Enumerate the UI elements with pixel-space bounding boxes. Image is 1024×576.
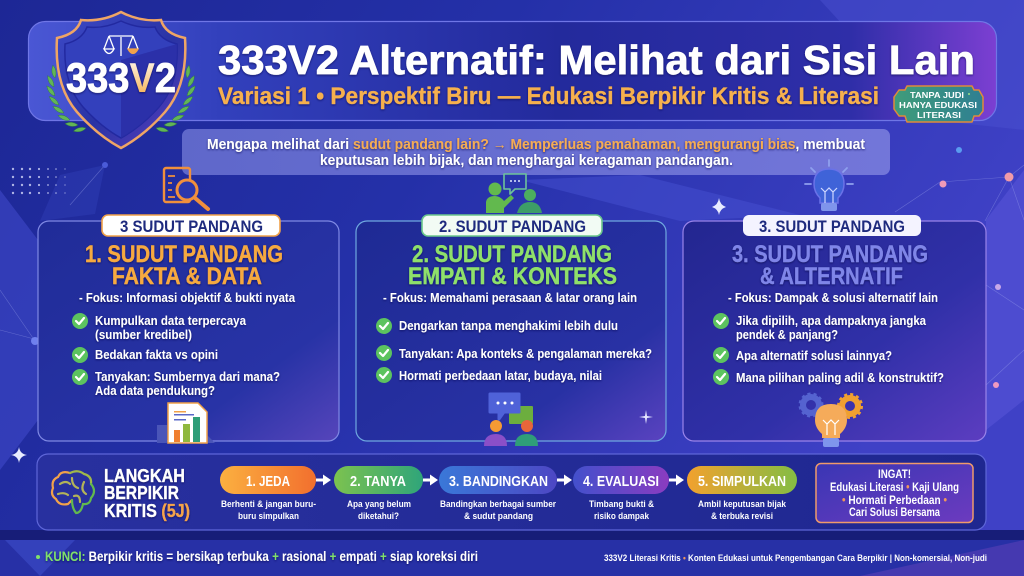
step 5: & terbuka revisi [711,511,773,522]
badge: 3 sudut pandang: 3 SUDUT PANDANG [120,218,263,236]
heading: KRITIS (5J) [104,501,190,521]
heading: EMPATI & KONTEKS [408,263,617,290]
footer key message: KUNCI: Berpikir kritis = bersikap terbuka + rasional + empati + siap koreksi diri [45,549,478,564]
focus line: - Fokus: Dampak & solusi alternatif lain [728,290,938,305]
checklist: (sumber kredibel) [95,327,192,342]
callout: ingat: • Hormati Perbedaan • [842,495,947,507]
callout: ingat: INGAT! [878,469,911,481]
step 1 [220,466,316,522]
icon: chat people [484,394,538,446]
badge: tanpa judi [894,86,983,122]
intro box: keputusan lebih bijak, dan menghargai keragaman pandangan. [320,153,733,169]
heading [85,241,283,290]
checklist: Ada data pendukung? [95,383,215,398]
heading: BERPIKIR [104,483,179,503]
step 3: & sudut pandang [464,511,533,522]
arrow [316,474,331,486]
checklist [376,318,652,383]
heading: FAKTA & DATA [112,263,262,290]
icon: scales [104,36,138,56]
heading: 2. SUDUT PANDANG [412,241,612,268]
icon: people talking [486,174,542,213]
step 3: Bandingkan berbagai sumber [440,499,556,510]
badge: 2 sudut pandang: 2. SUDUT PANDANG [439,218,586,236]
checklist: pendek & panjang? [736,327,838,342]
step 2: 2. TANYA [350,474,406,490]
logo wordmark: 333V2 [66,54,176,101]
arrow [557,474,572,486]
logo shield [45,12,197,148]
callout: ingat: Edukasi Literasi • Kaji Ulang [830,482,959,494]
badge: tanpa judi: LITERASI [917,110,961,120]
step 2 [334,466,423,522]
step 2: Apa yang belum [347,499,411,510]
focus line: - Fokus: Memahami perasaan & latar orang lain [383,290,637,305]
step 2: diketahui? [358,511,399,522]
heading: 3. SUDUT PANDANG [732,241,928,268]
checklist: Kumpulkan data terpercaya [95,313,247,328]
icon: report chart [157,403,215,443]
checklist: Hormati perbedaan latar, budaya, nilai [399,368,602,383]
intro box: Mengapa melihat dari sudut pandang lain? → Memperluas pemahaman, mengurangi bias, membuat [207,137,865,153]
checklist [713,313,944,385]
checklist: Mana pilihan paling adil & konstruktif? [736,370,944,385]
step 5 [687,466,797,522]
subtitle: Variasi 1 • Perspektif Biru — Edukasi Berpikir Kritis & Literasi [218,83,879,110]
title: 333V2 Alternatif: Melihat dari Sisi Lain [218,37,975,83]
badge: tanpa judi: HANYA EDUKASI [899,100,977,110]
badge: tanpa judi: TANPA JUDI [910,90,964,100]
step 4 [573,466,669,522]
intro box [182,129,890,175]
arrow [669,474,684,486]
panel: langkah berpikir kritis [37,454,986,530]
icon: brain [52,471,94,513]
icon: document magnifier [164,168,208,209]
checklist: Tanyakan: Sumbernya dari mana? [95,369,280,384]
icon: laurel wreath [45,65,197,133]
step 1: Berhenti & jangan buru- [221,499,316,510]
checklist: Dengarkan tanpa menghakimi lebih dulu [399,318,618,333]
checklist: Jika dipilih, apa dampaknya jangka [736,313,927,328]
step 5: 5. SIMPULKAN [698,474,786,490]
checklist: Tanyakan: Apa konteks & pengalaman mereka? [399,346,652,361]
checklist [72,313,280,398]
step 1: buru simpulkan [238,511,299,522]
panel: alternatif [683,215,986,447]
step 4: 4. EVALUASI [583,474,659,490]
heading: LANGKAH [104,466,185,486]
heading [104,466,190,521]
heading: 1. SUDUT PANDANG [85,241,283,268]
icon: gears and bulb [800,394,862,447]
heading: & ALTERNATIF [760,263,903,290]
callout: ingat [816,464,973,522]
heading [408,241,617,290]
arrow [423,474,438,486]
step 5: Ambil keputusan bijak [698,499,787,510]
step 4: risiko dampak [594,511,650,522]
focus line: - Fokus: Informasi objektif & bukti nyata [79,290,296,305]
callout: ingat: Cari Solusi Bersama [849,507,940,519]
step 1: 1. JEDA [246,474,290,490]
header panel [28,22,996,120]
checklist: Bedakan fakta vs opini [95,347,218,362]
badge: 3 sudut pandang: 3. SUDUT PANDANG [759,218,905,236]
icon: light bulb [805,160,853,211]
step 3: 3. BANDINGKAN [449,474,548,490]
heading [732,241,928,290]
panel: fakta dan data [38,215,339,443]
checklist: Apa alternatif solusi lainnya? [736,348,892,363]
panel: empati dan konteks [356,215,666,446]
step 3 [439,466,557,522]
step 4: Timbang bukti & [589,499,654,510]
